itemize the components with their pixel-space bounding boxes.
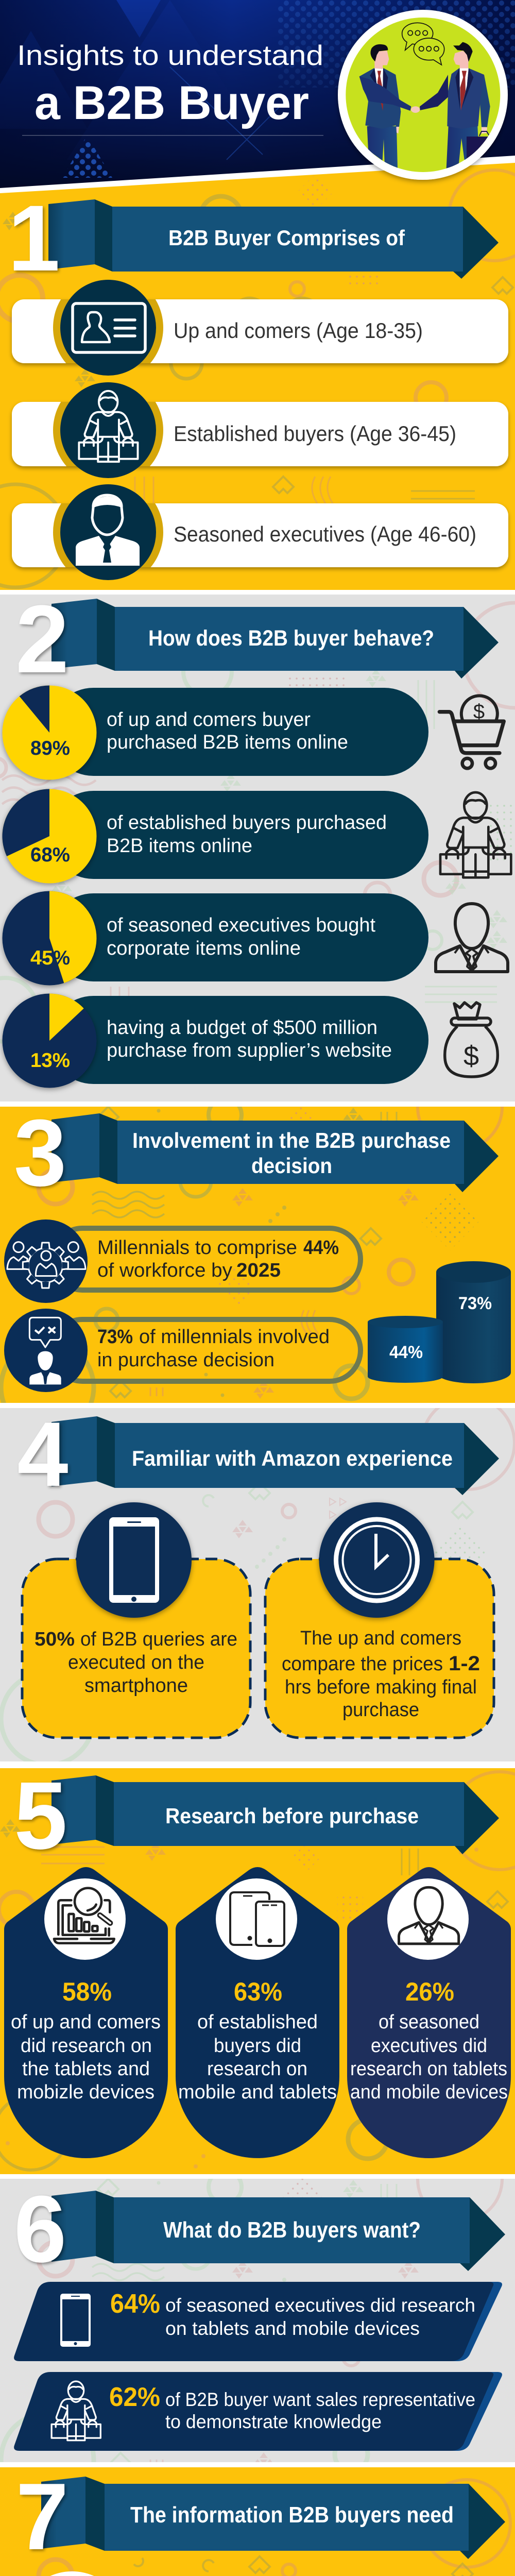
card: up and comers research: mobizle devices	[17, 2081, 154, 2103]
stat row: 45%: 45	[30, 947, 53, 969]
icon: executive	[399, 1887, 459, 1944]
card: price comparison: compare the prices	[282, 1653, 443, 1675]
section 6 ribbon heading	[52, 2191, 505, 2271]
card: seasoned executives research: and mobile devices	[350, 2081, 508, 2103]
card: up and comers research	[4, 1867, 168, 2158]
card: established buyers research: buyers did	[214, 2035, 301, 2057]
left man	[359, 44, 411, 168]
panel: section 1	[0, 163, 515, 590]
stat: millennials workforce: Millennials to comprise	[97, 1237, 297, 1259]
header illustration: handshake	[338, 10, 508, 180]
card: price comparison: 1-2	[449, 1652, 480, 1675]
stat row: 45%: of seasoned executives bought	[107, 914, 375, 936]
pie: 68%	[2, 789, 97, 883]
card: established buyers research: research on	[207, 2058, 307, 2080]
stat bar: 62%: 62%	[109, 2382, 160, 2412]
right man	[411, 42, 490, 168]
card: seasoned executives research: 26%	[405, 1977, 454, 2006]
pie: 45%	[2, 891, 97, 985]
section 3 ribbon heading: Involvement in the B2B purchase	[132, 1128, 451, 1153]
panel: section 3	[0, 1107, 515, 1403]
icon: shopper	[52, 2381, 100, 2441]
section number 5: 5	[14, 1762, 67, 1869]
icon: speech bubbles	[402, 23, 444, 65]
stat: millennials decision	[4, 1309, 360, 1392]
section number 7: 7	[16, 2463, 68, 2569]
card: smartphone queries: smartphone	[84, 1675, 188, 1697]
card: up and comers research: did research on	[21, 2035, 152, 2057]
card: smartphone queries: 50%	[35, 1629, 75, 1650]
icon: shopper outline	[440, 792, 511, 877]
chart: cylinders 44% and 73%: 73%	[458, 1294, 492, 1313]
card: established buyers research: of established	[197, 2011, 318, 2033]
section 1 ribbon heading	[48, 199, 499, 279]
section 3 ribbon heading	[52, 1113, 499, 1192]
stat row: 68%	[2, 789, 428, 883]
chart: cylinders 44% and 73%: 44%	[389, 1343, 423, 1362]
section number 4: 4	[18, 1403, 68, 1505]
icon: shopper	[79, 391, 138, 462]
section number 2: 2	[15, 585, 69, 693]
pie: 13%	[2, 993, 97, 1088]
card: price comparison: purchase	[342, 1699, 419, 1721]
card: smartphone queries: of B2B queries are	[80, 1629, 237, 1650]
section 2 ribbon heading: How does B2B buyer behave?	[148, 626, 434, 651]
card: price comparison	[265, 1502, 494, 1738]
stat: millennials decision: 73%	[97, 1326, 133, 1348]
stat row: 68%: B2B items online	[107, 835, 252, 857]
stat row: 13%: having a budget of $500 million	[107, 1017, 377, 1039]
stat row: 89%	[2, 685, 428, 780]
stat: millennials workforce: 2025	[236, 1260, 281, 1281]
main title: Insights to understand	[17, 39, 323, 71]
section 5 ribbon heading: Research before purchase	[165, 1804, 419, 1828]
icon: executive	[76, 495, 140, 566]
icon: clock	[319, 1502, 435, 1618]
stat: millennials decision: of millennials involved	[139, 1326, 330, 1348]
icon: smartphone	[60, 2294, 91, 2347]
stat: millennials workforce: 44%	[303, 1237, 339, 1259]
card: up and comers research: of up and comers	[11, 2011, 161, 2033]
section 4 ribbon heading: Familiar with Amazon experience	[132, 1446, 453, 1470]
section 7 ribbon heading	[41, 2477, 505, 2559]
main title	[17, 39, 323, 136]
icon: shopping cart	[439, 696, 504, 768]
stat bar: 64%: 64%	[110, 2289, 160, 2319]
item: seasoned executives: Seasoned executives (Age 46-60)	[174, 522, 476, 546]
panel: section 6	[0, 2179, 515, 2462]
stat row: 13%	[2, 993, 428, 1088]
icon: id card	[73, 303, 145, 352]
card: up and comers research: the tablets and	[22, 2058, 150, 2080]
icon: shopping cart: $	[473, 700, 485, 723]
panel: section 4	[0, 1397, 515, 1765]
card: smartphone queries	[22, 1502, 250, 1738]
icon: smartphone	[76, 1502, 192, 1618]
section 1 ribbon heading: B2B Buyer Comprises of	[168, 226, 405, 250]
stat: millennials decision: in purchase decision	[97, 1349, 274, 1371]
stat bar: 64%	[14, 2282, 502, 2361]
panel: section 5	[0, 1762, 515, 2174]
card: established buyers research	[176, 1867, 339, 2158]
stat: millennials workforce: of workforce by	[97, 1260, 232, 1281]
icon: laptop analytics	[54, 1888, 114, 1943]
panel: section 2	[0, 585, 515, 1101]
card: seasoned executives research: executives did	[371, 2035, 487, 2057]
item: established buyers: Established buyers (Age 36-45)	[174, 421, 456, 446]
icon: person with decision bubble	[4, 1309, 88, 1392]
icon: money bag	[445, 1003, 497, 1077]
card: seasoned executives research	[347, 1867, 511, 2158]
section 4 ribbon heading	[52, 1416, 499, 1495]
card: price comparison: hrs before making final	[285, 1676, 477, 1698]
item: up and comers: Up and comers (Age 18-35)	[174, 318, 423, 343]
section 7 ribbon heading: The information B2B buyers need	[130, 2502, 454, 2528]
card: price comparison: The up and comers	[300, 1628, 461, 1649]
stat row: 13%: purchase from supplier’s website	[107, 1040, 392, 1061]
section 6 ribbon heading: What do B2B buyers want?	[163, 2217, 421, 2243]
icon: team gear	[4, 1219, 88, 1303]
stat: millennials workforce	[4, 1219, 360, 1303]
card: seasoned executives research: research on tablets	[350, 2058, 507, 2080]
card: established buyers research: mobile and tablets	[178, 2081, 337, 2103]
stat row: 68%: of established buyers purchased	[107, 812, 387, 834]
stat bar: 62%	[14, 2372, 502, 2451]
icon: executive outline	[436, 904, 508, 972]
stat bar: 64%: on tablets and mobile devices	[165, 2318, 420, 2339]
stat bar: 62%: of B2B buyer want sales representative	[165, 2389, 475, 2410]
stat row: 45%: corporate items online	[107, 938, 301, 959]
stat row: 13%: 13%	[30, 1049, 70, 1072]
stat bar: 64%: of seasoned executives did research	[165, 2295, 475, 2316]
item: up and comers	[9, 280, 511, 376]
stat bar: 62%: to demonstrate knowledge	[165, 2411, 382, 2432]
stat row: 89%: of up and comers buyer	[107, 709, 311, 731]
stat pill: 67%	[18, 2571, 506, 2576]
stat row: 68%: 68%	[30, 844, 70, 866]
stat row: 45%	[2, 891, 428, 985]
section number 6: 6	[14, 2176, 66, 2282]
main title: a B2B Buyer	[35, 77, 309, 129]
card: smartphone queries: executed on the	[68, 1652, 204, 1673]
pie: 89%	[2, 685, 97, 780]
stat row: 45%: %	[53, 947, 70, 969]
item: seasoned executives	[9, 484, 511, 580]
section 2 ribbon heading	[52, 599, 499, 679]
panel: section 7	[0, 2463, 515, 2576]
item: established buyers	[9, 382, 511, 478]
icon: money bag: $	[464, 1041, 479, 1072]
chart: cylinders 44% and 73%	[368, 1261, 511, 1383]
card: seasoned executives research: of seasoned	[379, 2011, 479, 2033]
card: established buyers research: 63%	[234, 1977, 282, 2006]
section number 3: 3	[14, 1099, 66, 1206]
card: up and comers research: 58%	[62, 1977, 112, 2006]
icon: tablet and phone	[230, 1892, 284, 1946]
header background	[0, 0, 515, 191]
section 5 ribbon heading	[52, 1775, 499, 1854]
stat row: 89%: 89%	[30, 737, 70, 759]
section 3 ribbon heading: decision	[251, 1154, 332, 1178]
section number 1: 1	[8, 185, 60, 291]
stat row: 89%: purchased B2B items online	[107, 732, 348, 753]
